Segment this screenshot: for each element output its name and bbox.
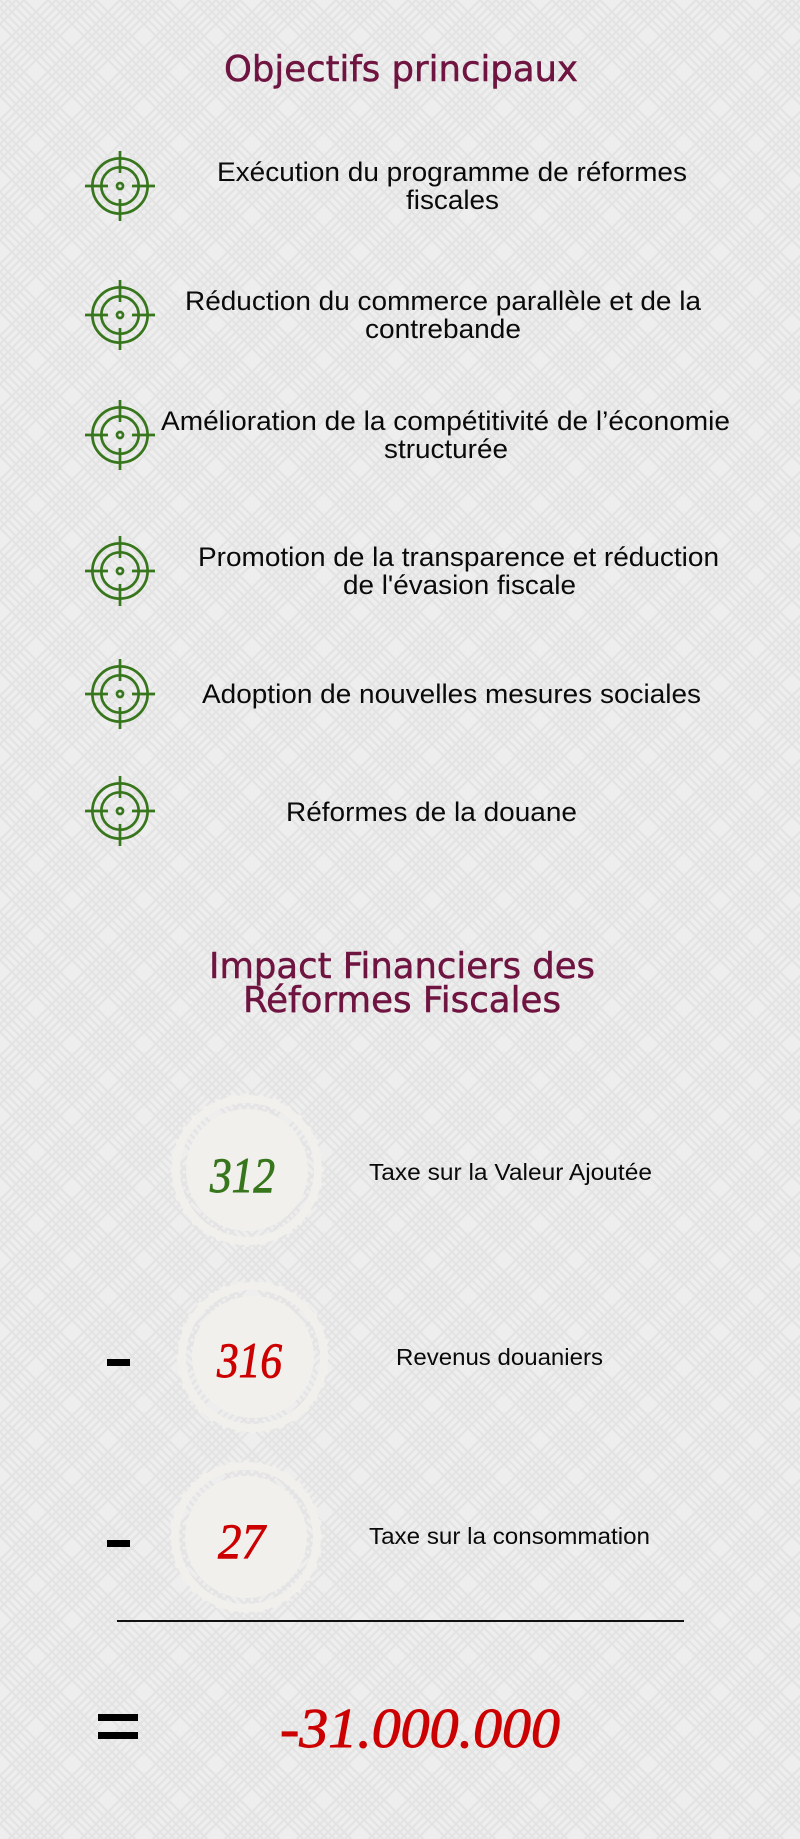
title: Impact Financiers des Réformes Fiscales [209,946,595,1021]
minus sign [107,1359,130,1366]
text: objective 1: fiscales [406,185,499,215]
objective 3 [85,400,730,470]
sum line [117,1620,684,1622]
row: Taxe sur la consommation [107,1463,650,1611]
text: objective 4: de l'évasion fiscale [343,570,576,600]
icon: target [85,776,155,846]
title: Objectifs principaux: Objectifs principaux [224,49,578,90]
text: objective 5: Adoption de nouvelles mesures sociales [202,679,701,709]
badge: 316: 316 [216,1332,282,1388]
text: objective 2: Réduction du commerce parallèle et de la [185,286,702,316]
label: Taxe sur la consommation: Taxe sur la consommation [369,1523,650,1549]
row: Taxe sur la Valeur Ajoutée [173,1096,652,1244]
title: Impact Financiers des Réformes Fiscales: Impact Financiers des [209,946,595,987]
equals sign [98,1714,138,1739]
icon: target [85,536,155,606]
text: objective 1: Exécution du programme de réformes [217,157,687,187]
icon: target [85,280,155,350]
objective 2 [85,280,702,350]
badge: 27: 27 [218,1513,267,1569]
row: Revenus douaniers [107,1283,603,1431]
icon: target [85,659,155,729]
total: -31.000.000: -31.000.000 [280,1698,560,1760]
objective 6 [85,776,577,846]
label: Revenus douaniers: Revenus douaniers [396,1344,603,1370]
badge: 312 [173,1096,321,1244]
objective 5 [85,659,701,729]
badge: 312: 312 [209,1147,275,1203]
text: objective 1 [217,157,687,215]
text: objective 2: contrebande [365,314,521,344]
icon: target [85,151,155,221]
badge: 27 [172,1463,320,1611]
badge: 316 [179,1283,327,1431]
text: objective 4 [198,542,719,600]
text: objective 2 [185,286,702,344]
text: objective 3: structurée [384,434,508,464]
objective 4 [85,536,719,606]
minus sign [107,1540,130,1547]
text: objective 4: Promotion de la transparence et réduction [198,542,719,572]
objective 1 [85,151,687,221]
text: objective 6: Réformes de la douane [286,797,577,827]
icon: target [85,400,155,470]
text: objective 3 [161,406,730,464]
text: objective 3: Amélioration de la compétitivité de l’économie [161,406,730,436]
label: Taxe sur la Valeur Ajoutée: Taxe sur la Valeur Ajoutée [369,1159,652,1185]
title: Impact Financiers des Réformes Fiscales: Réformes Fiscales [243,980,561,1021]
